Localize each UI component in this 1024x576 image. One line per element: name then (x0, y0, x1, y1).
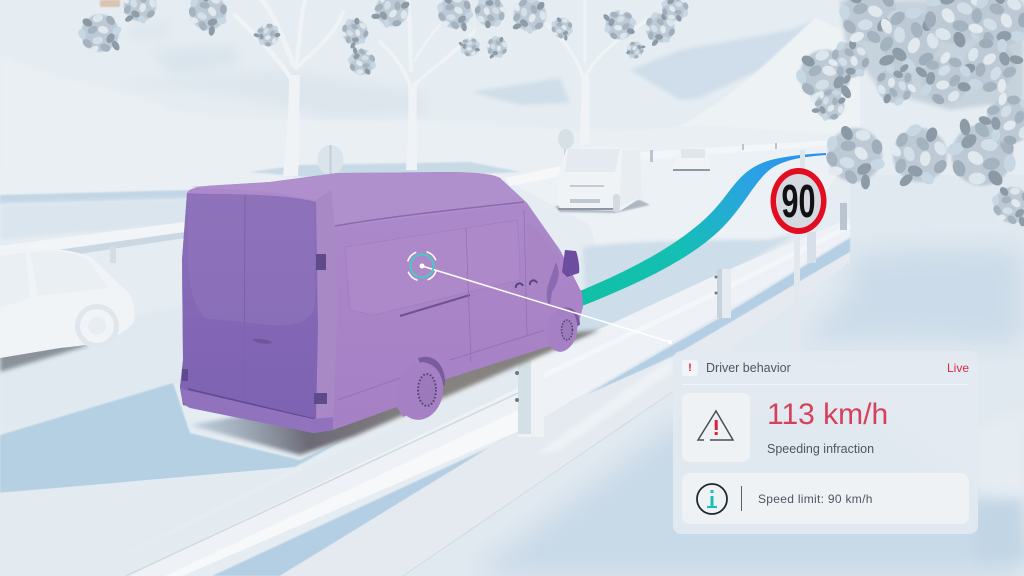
tree foliage (77, 0, 696, 80)
van front wheel (543, 306, 581, 354)
speed limit sign: 90 (782, 175, 816, 227)
tree branches (235, 0, 650, 90)
speed trail (580, 153, 826, 306)
van roof (191, 172, 527, 227)
van rear window (188, 194, 315, 325)
divider (741, 486, 742, 511)
purple van (180, 172, 583, 433)
small road sign backs (318, 129, 574, 175)
speed limit sign (770, 150, 826, 350)
icon: warning triangle (696, 410, 734, 441)
blue strip and embankment behind front guardrail (212, 238, 850, 576)
van rear wheel (392, 358, 448, 424)
road surface (0, 146, 850, 576)
van shadow (190, 330, 600, 455)
warning tile (682, 393, 750, 462)
trees (77, 0, 1024, 233)
distant white car (672, 147, 711, 171)
live status: Live (947, 361, 969, 375)
van corner pillar (313, 190, 338, 433)
van body (180, 172, 583, 433)
icon: info (696, 483, 728, 515)
snow field shadows left of road (0, 162, 520, 240)
infraction label: Speeding infraction (767, 442, 874, 456)
van wheel arches (418, 357, 445, 395)
speed limit bar (682, 473, 969, 524)
speed limit text: Speed limit: 90 km/h (758, 492, 873, 506)
icon: alert badge: ! (688, 362, 692, 374)
target marker and connector line (403, 247, 672, 344)
icon: alert badge (682, 360, 698, 376)
panel title: Driver behavior (706, 361, 791, 375)
header divider (682, 384, 969, 385)
speed value: 113 km/h (767, 398, 888, 431)
header (682, 360, 969, 385)
front guardrail (82, 218, 850, 576)
van cab window and door handles (527, 223, 560, 293)
far guardrail (0, 140, 835, 266)
panel: driver behavior (673, 351, 978, 534)
guardrail posts (515, 203, 847, 437)
large right tree foliage (794, 0, 1024, 233)
van rear doors (180, 193, 318, 433)
snow slope right of guardrail (400, 175, 1024, 576)
left white car (0, 248, 134, 372)
distant white van (555, 147, 650, 213)
tree trunks (283, 75, 590, 176)
van side panels (345, 220, 520, 315)
